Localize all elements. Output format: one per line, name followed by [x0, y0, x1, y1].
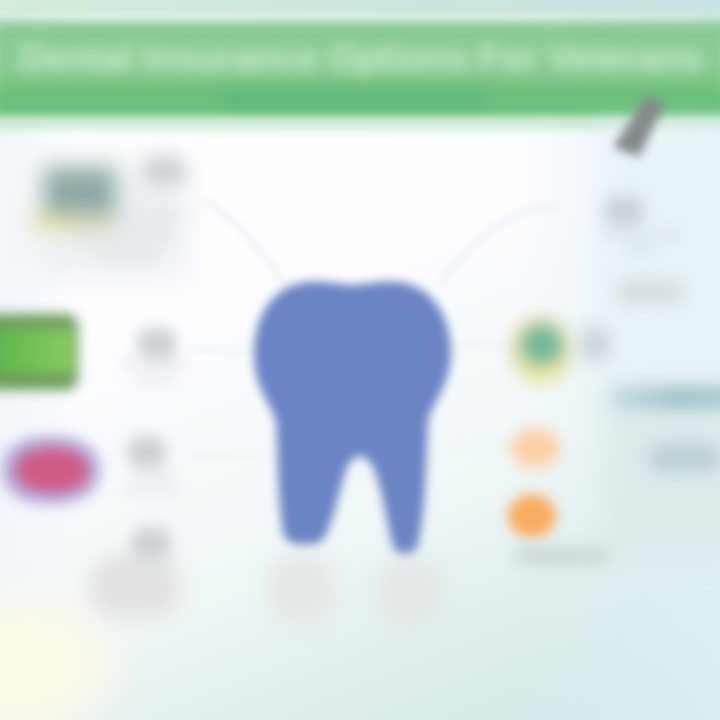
- note: Benefits: [618, 284, 658, 296]
- icon: pencil: [609, 92, 668, 162]
- card highlight: [0, 328, 74, 374]
- pale top strip: [0, 0, 720, 14]
- heading blob: [131, 527, 171, 561]
- banner subtitle: [225, 93, 485, 107]
- mid-right label: [580, 326, 610, 362]
- heading: [128, 436, 166, 468]
- title banner: [0, 20, 720, 120]
- heading: Tips: [604, 200, 624, 212]
- panel: lower right text: [650, 444, 720, 472]
- text block: top right: [598, 190, 686, 308]
- icon: orange circle: [508, 494, 556, 538]
- icon: pink oval: [2, 436, 100, 504]
- oval centre: [16, 448, 88, 492]
- text block: middle left: [122, 322, 188, 386]
- tooth base right: [378, 560, 442, 624]
- panel: right column: [600, 130, 720, 380]
- tooth base left: [268, 556, 334, 622]
- title: Dental Insurance Options For Veterans: [20, 37, 703, 78]
- circle centre: [523, 326, 561, 364]
- heading: VADIP: [138, 332, 170, 344]
- panel: right column lower: [605, 385, 720, 555]
- text block: lower left: [122, 430, 181, 496]
- heading: [138, 328, 176, 360]
- heading: [145, 156, 185, 186]
- caption under orange circle: Dental care: [514, 548, 575, 562]
- illustration: tooth: [246, 274, 458, 560]
- description: Coverage for basic dental care and cleanings: [66, 207, 184, 263]
- text block: bottom left: [86, 522, 184, 622]
- icon: light orange circle: [510, 428, 560, 468]
- description: Private insurance: [124, 466, 181, 496]
- text block: top left: [66, 150, 191, 263]
- icon: green circle: [510, 316, 572, 384]
- description: Dental plan options: [122, 356, 188, 386]
- heading: [604, 196, 644, 226]
- icon: chart illustration: [22, 153, 130, 242]
- panel: lower right heading band: [612, 386, 720, 410]
- panel: left column: [30, 160, 185, 275]
- icon: green card: [0, 314, 78, 390]
- heading: Delta: [128, 440, 154, 452]
- body blob: [90, 555, 180, 617]
- description: Compare plan costs: [600, 226, 682, 256]
- heading: Plan: [145, 160, 167, 172]
- warm glow bottom left: [0, 600, 110, 720]
- note: [618, 280, 684, 304]
- caption under orange circle: [514, 546, 610, 566]
- banner lower fade: [0, 119, 720, 129]
